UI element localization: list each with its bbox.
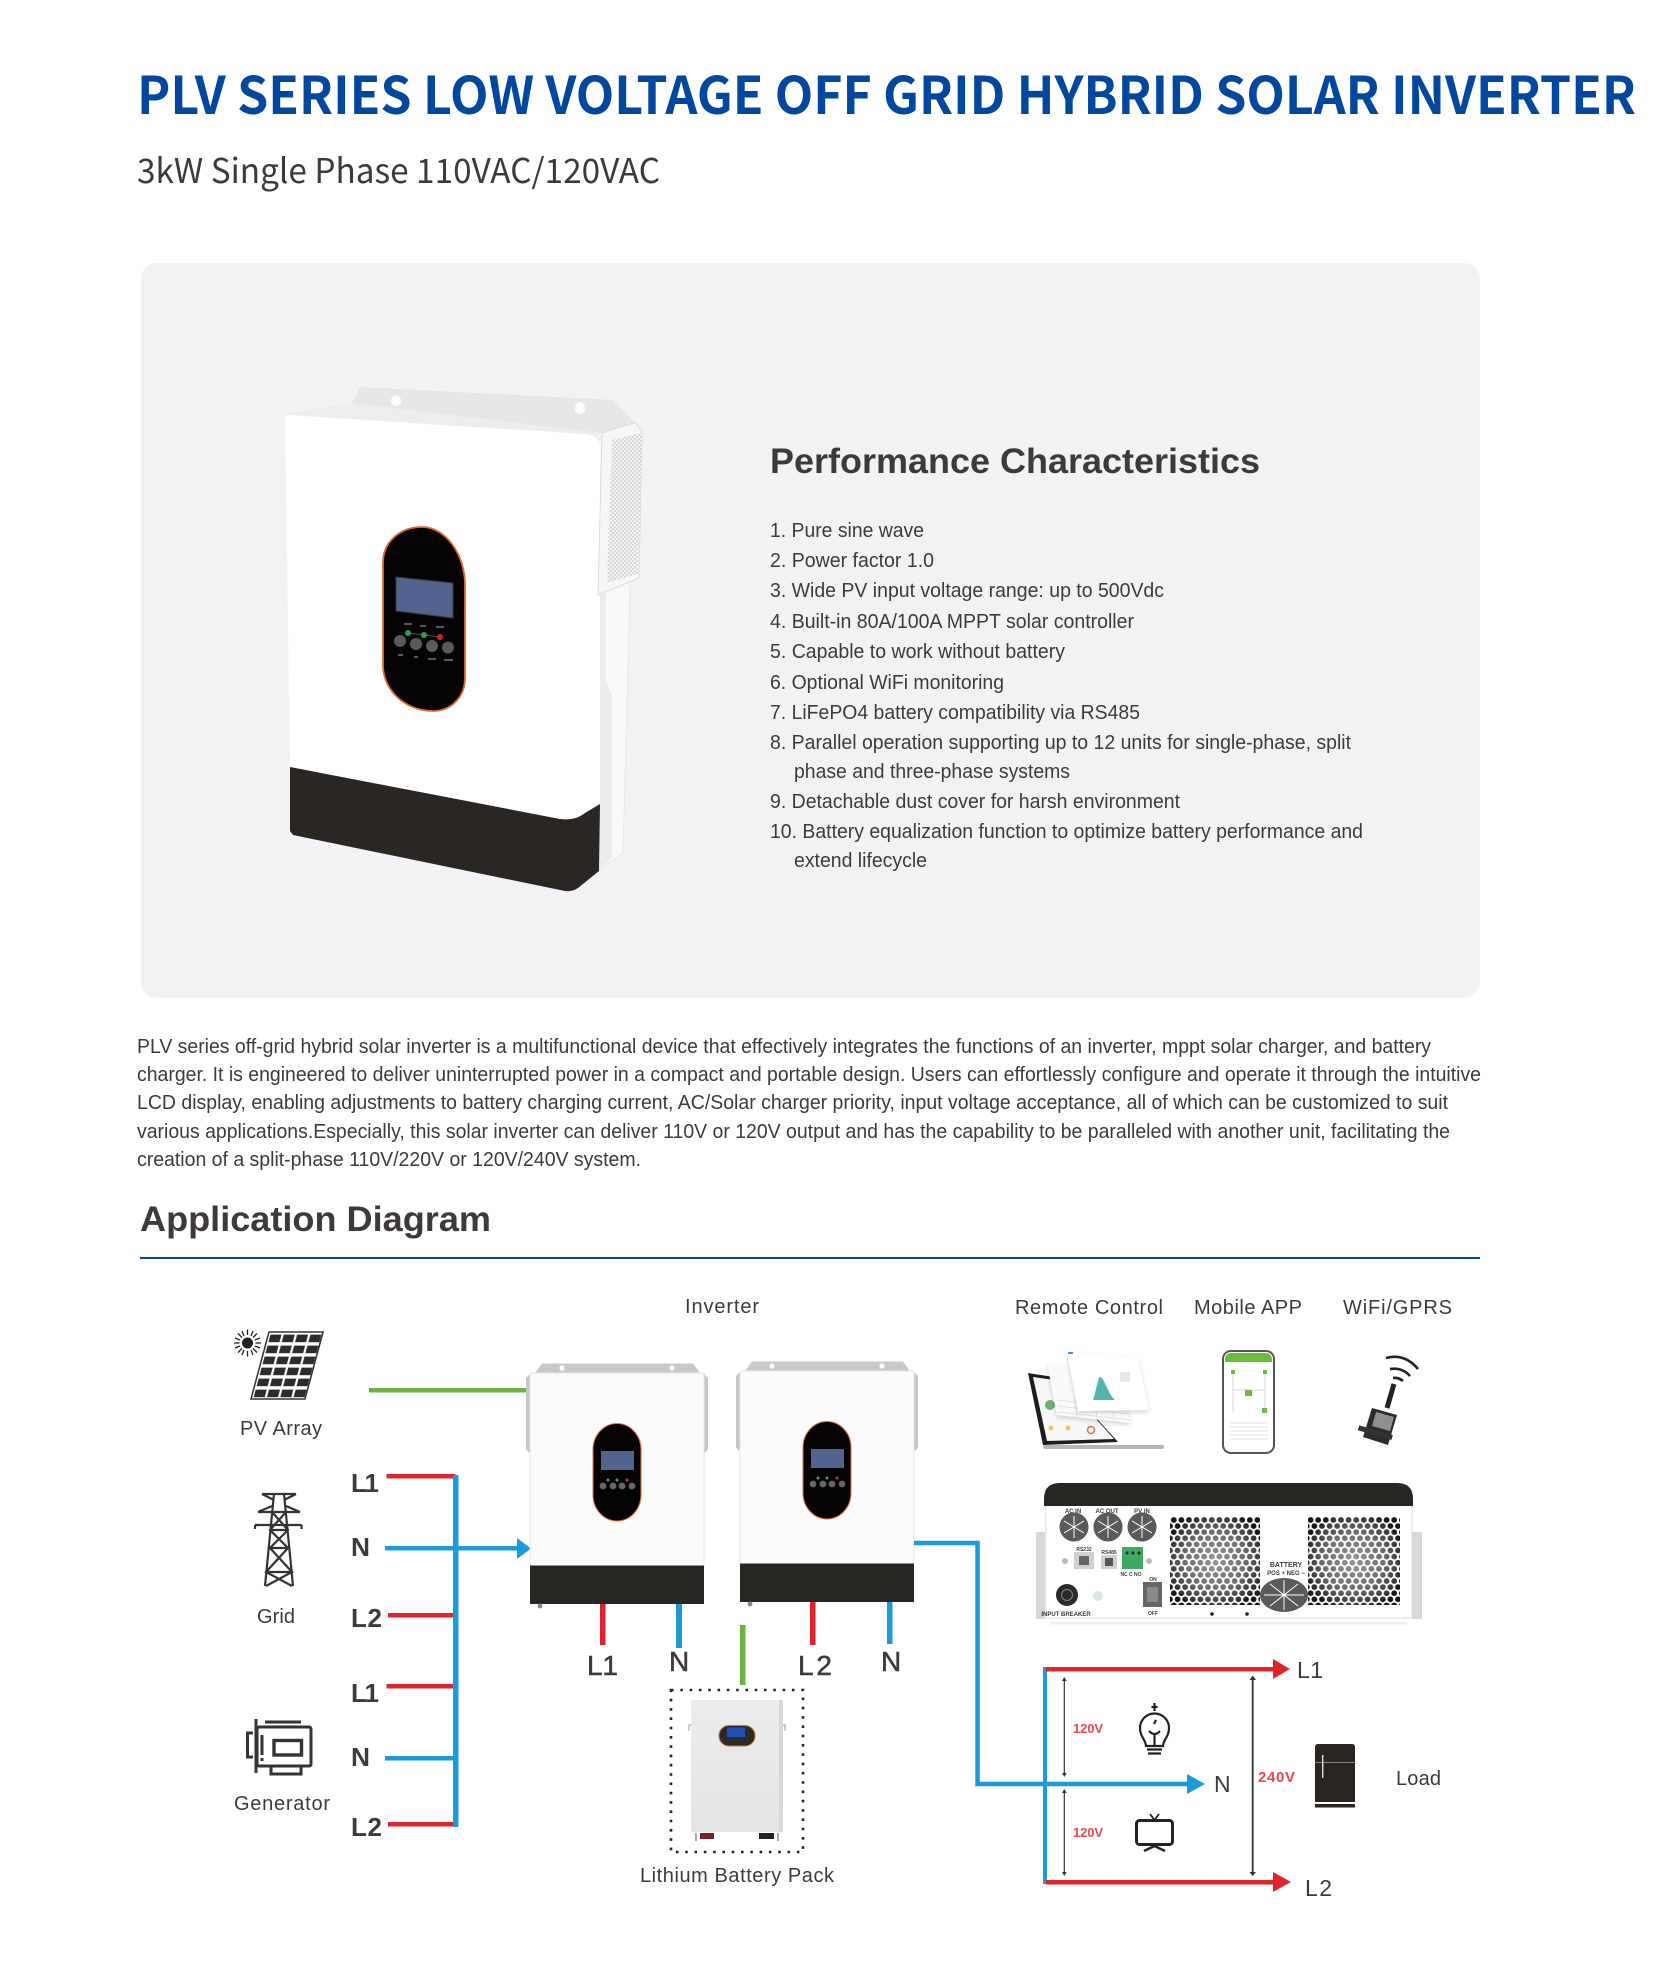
fan grilles [1165,1513,1404,1609]
application diagram [234,1296,1453,1901]
line: PV feed [369,1388,527,1392]
voltage labels: 120V [1073,1721,1103,1736]
wiring: output to loads [914,1543,1291,1892]
wiring: inverter outputs [600,1602,892,1685]
icon: grid tower [255,1494,302,1586]
rear panel port labels: RS485 [1101,1550,1117,1556]
label: PV Array: PV Array [240,1418,323,1440]
rear panel port labels [1041,1509,1305,1618]
list: performance characteristics: 1. Pure sine wave [770,520,924,542]
labels: input lines [351,1468,382,1842]
inverter 2 [736,1362,918,1606]
voltage labels: 120V [1073,1825,1103,1840]
list: performance characteristics: 7. LiFePO4 battery compatibility via RS485 [770,702,1140,724]
rear panel port labels: ON [1149,1577,1157,1583]
labels: inverter outputs: L2 [798,1650,832,1681]
label: Lithium Battery Pack: Lithium Battery Pack [640,1865,835,1887]
list: performance characteristics: extend lifecycle [794,850,927,872]
description paragraph: charger. It is engineered to deliver uninterrupted power in a compact and portable design. Users can effortlessly configure and operate it through the intuitive [137,1064,1481,1086]
labels: output lines: N [1214,1771,1231,1797]
icon: generator [248,1719,311,1774]
label: Generator: Generator [234,1793,331,1815]
title: PLV SERIES LOW VOLTAGE OFF GRID HYBRID SOLAR INVERTER [137,54,1636,129]
heading: performance characteristics: Performance Characteristics [770,442,1260,481]
labels: input lines: L1 [351,1468,379,1498]
list: performance characteristics: 4. Built-in 80A/100A MPPT solar controller [770,611,1134,633]
list: performance characteristics: 5. Capable to work without battery [770,641,1065,663]
labels: remote monitoring [1015,1297,1453,1319]
labels: inverter outputs: L1 [587,1650,618,1681]
display panel [383,527,465,711]
labels: remote monitoring: Mobile APP [1194,1297,1303,1319]
icon: phone app [1223,1351,1274,1453]
labels: output lines: L2 [1305,1875,1332,1901]
cable glands [1059,1512,1157,1542]
breaker, ground and switch [1056,1582,1162,1607]
icon: laptop with dashboards [1028,1352,1164,1449]
description paragraph: PLV series off-grid hybrid solar inverter is a multifunctional device that effectively integrates the functions of an inverter, mppt solar charger, and battery [137,1036,1431,1058]
label: Inverter: Inverter [685,1296,760,1318]
rear panel port labels: INPUT BREAKER [1041,1612,1091,1618]
description paragraph: LCD display, enabling adjustments to battery charging current, AC/Solar charger priority, input voltage acceptance, all of which can be customized to suit [137,1092,1448,1114]
label: Grid: Grid [257,1606,296,1628]
labels: input lines: L2 [351,1603,382,1633]
list: performance characteristics: 9. Detachable dust cover for harsh environment [770,791,1180,813]
rear panel port labels: PV IN [1134,1509,1150,1515]
inverter rear panel [1036,1483,1422,1624]
panel: product and performance characteristics [141,263,1480,998]
rear panel port labels: RS232 [1076,1547,1092,1553]
labels: inverter outputs: N [881,1646,901,1677]
icon: light bulb [1140,1703,1169,1754]
labels: inverter outputs: N [669,1646,689,1677]
labels: output lines: L1 [1297,1657,1323,1683]
description paragraph: various applications.Especially, this solar inverter can deliver 110V or 120V output and has the capability to be paralleled with another unit, facilitating the [137,1121,1450,1143]
description paragraph [137,1036,1481,1171]
labels: input lines: N [351,1532,370,1562]
wiring: input bus [385,1474,531,1827]
description paragraph: creation of a split-phase 110V/220V or 120V/240V system. [137,1149,641,1171]
icon: PV array [234,1330,323,1399]
rear panel port labels: AC OUT [1096,1509,1119,1515]
rear panel port labels: POS + NEG − [1267,1571,1305,1577]
labels: input lines: L2 [351,1812,382,1842]
labels: input lines: N [351,1742,370,1772]
list: performance characteristics: phase and three-phase systems [794,761,1070,783]
subtitle: 3kW Single Phase 110VAC/120VAC [137,144,660,193]
heading: application diagram: Application Diagram [140,1200,491,1239]
labels: remote monitoring: Remote Control [1015,1297,1164,1319]
label: Load: Load [1396,1768,1442,1790]
voltage labels [1073,1721,1295,1840]
list: performance characteristics: 6. Optional WiFi monitoring [770,672,1004,694]
labels: input lines: L1 [351,1678,379,1708]
voltage labels: 240V [1258,1769,1295,1786]
list: performance characteristics: 10. Battery equalization function to optimize battery performance and [770,821,1363,843]
icon: wifi dongle [1358,1357,1418,1445]
list: performance characteristics: 8. Parallel operation supporting up to 12 units for single-phase, split [770,732,1351,754]
battery pack [671,1690,803,1852]
rear panel port labels: BATTERY [1270,1562,1302,1569]
list: performance characteristics: 2. Power factor 1.0 [770,550,934,572]
labels: remote monitoring: WiFi/GPRS [1343,1297,1453,1319]
list: performance characteristics: 3. Wide PV input voltage range: up to 500Vdc [770,580,1164,602]
rear panel port labels: OFF [1148,1611,1158,1617]
voltage arrows [1062,1676,1256,1876]
labels: inverter outputs [587,1646,901,1681]
icon: refrigerator [1315,1744,1355,1808]
rear panel port labels: NC C NO [1120,1572,1142,1578]
product photo: inverter [285,387,642,891]
communication ports [1062,1547,1152,1569]
icon: television [1136,1814,1172,1851]
inverter 1 [526,1364,708,1608]
battery gland [1260,1578,1308,1612]
labels: output lines [1214,1657,1332,1901]
rear panel port labels: AC IN [1065,1509,1081,1515]
list: performance characteristics [770,520,1363,872]
